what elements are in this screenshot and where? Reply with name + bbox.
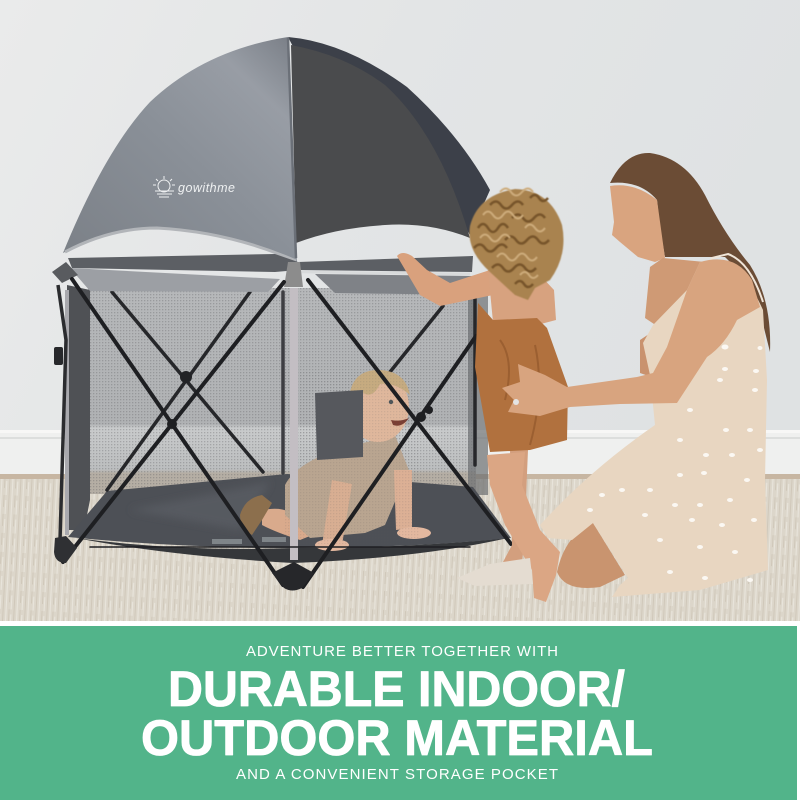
baby mouth (391, 418, 409, 426)
rail white line (300, 272, 470, 274)
canopy light panel (63, 37, 297, 262)
front fabric right (315, 274, 472, 295)
baby arm far (394, 470, 412, 530)
baby hand far (397, 527, 431, 539)
playard tent (52, 37, 511, 590)
banner headline line two: OUTDOOR MATERIAL (141, 710, 653, 766)
banner background (0, 626, 797, 800)
woman far arm (640, 330, 660, 380)
banner headline line one: DURABLE INDOOR/ (168, 661, 625, 717)
woman knee (557, 523, 625, 588)
woman ring (513, 399, 519, 405)
page separator (0, 621, 800, 626)
baby (240, 370, 431, 551)
baby arm near (322, 480, 352, 545)
back frame poles (107, 292, 475, 490)
left corner joint (52, 262, 78, 283)
front frame poles (63, 279, 511, 587)
woman (502, 153, 770, 597)
baby hair (350, 370, 410, 395)
woman near arm (502, 259, 760, 416)
woman dress (540, 262, 768, 597)
toddler leg (487, 452, 560, 602)
blanket on floor (457, 558, 533, 586)
green banner (0, 626, 800, 800)
baby head (347, 372, 409, 442)
canopy logo (153, 176, 235, 197)
baby outfit (285, 435, 412, 538)
canopy outer band (288, 37, 490, 235)
front fabric left (70, 268, 280, 292)
floor mat (68, 474, 511, 563)
baby eye (389, 400, 393, 404)
woman neck and chest (645, 258, 705, 326)
frame hinges (167, 406, 433, 429)
toddler romper (475, 303, 568, 452)
woman hair (610, 153, 770, 352)
baby legs (262, 509, 325, 540)
canopy lower trim (65, 228, 296, 261)
mat logo (212, 537, 286, 544)
woman dress polka dots (587, 344, 763, 582)
toddler hair (469, 188, 564, 300)
mesh overlay in front of baby (285, 372, 420, 544)
center pole sleeve (290, 288, 298, 560)
toddler (397, 188, 568, 602)
banner footer text: AND A CONVENIENT STORAGE POCKET (236, 766, 558, 783)
top rail back fabric (68, 254, 473, 272)
toddler arm (397, 253, 493, 306)
bottom left foot (54, 536, 77, 563)
brand name: gowithme (178, 181, 235, 195)
banner white edge (797, 626, 800, 800)
canopy seam (288, 38, 296, 258)
toddler back leg (503, 450, 528, 562)
mesh walls (65, 285, 488, 535)
banner kicker: ADVENTURE BETTER TOGETHER WITH (246, 643, 558, 660)
toddler back (488, 270, 556, 325)
left post and clip (54, 285, 66, 540)
canopy dark inner panel (291, 45, 470, 243)
baby hand near (315, 539, 349, 551)
bottom center foot (272, 562, 314, 590)
back pole hinge (180, 371, 192, 383)
sun icon (153, 176, 175, 197)
romper shadow (500, 340, 539, 445)
woman dress straps (692, 254, 763, 302)
woman face (610, 185, 665, 262)
center connector (284, 262, 303, 287)
storage pocket (315, 390, 363, 460)
background: wall, baseboard and rug (0, 0, 800, 622)
baby shoe (240, 495, 272, 535)
